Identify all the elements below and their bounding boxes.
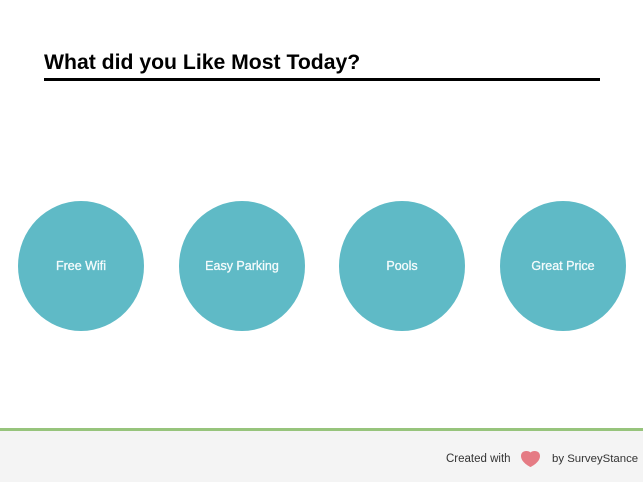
icon: heart: [521, 451, 540, 467]
option circle: Pools: Pools: [386, 259, 418, 273]
option circle: Easy Parking: Easy Parking: [205, 259, 279, 273]
footer text: by SurveyStance: by SurveyStance: [552, 453, 638, 465]
title: What did you Like Most Today?: [44, 51, 360, 74]
option circle: Great Price: [500, 201, 626, 331]
option circle: Free Wifi: Free Wifi: [56, 259, 106, 273]
footer green rule: [0, 428, 643, 431]
option circle: Pools: [339, 201, 465, 331]
title underline: [44, 78, 600, 81]
footer: [0, 428, 643, 482]
footer text: created with: Created with: [446, 453, 511, 465]
option circle: Great Price: Great Price: [531, 259, 595, 273]
option circle: Easy Parking: [179, 201, 305, 331]
option circle: Free Wifi: [18, 201, 144, 331]
